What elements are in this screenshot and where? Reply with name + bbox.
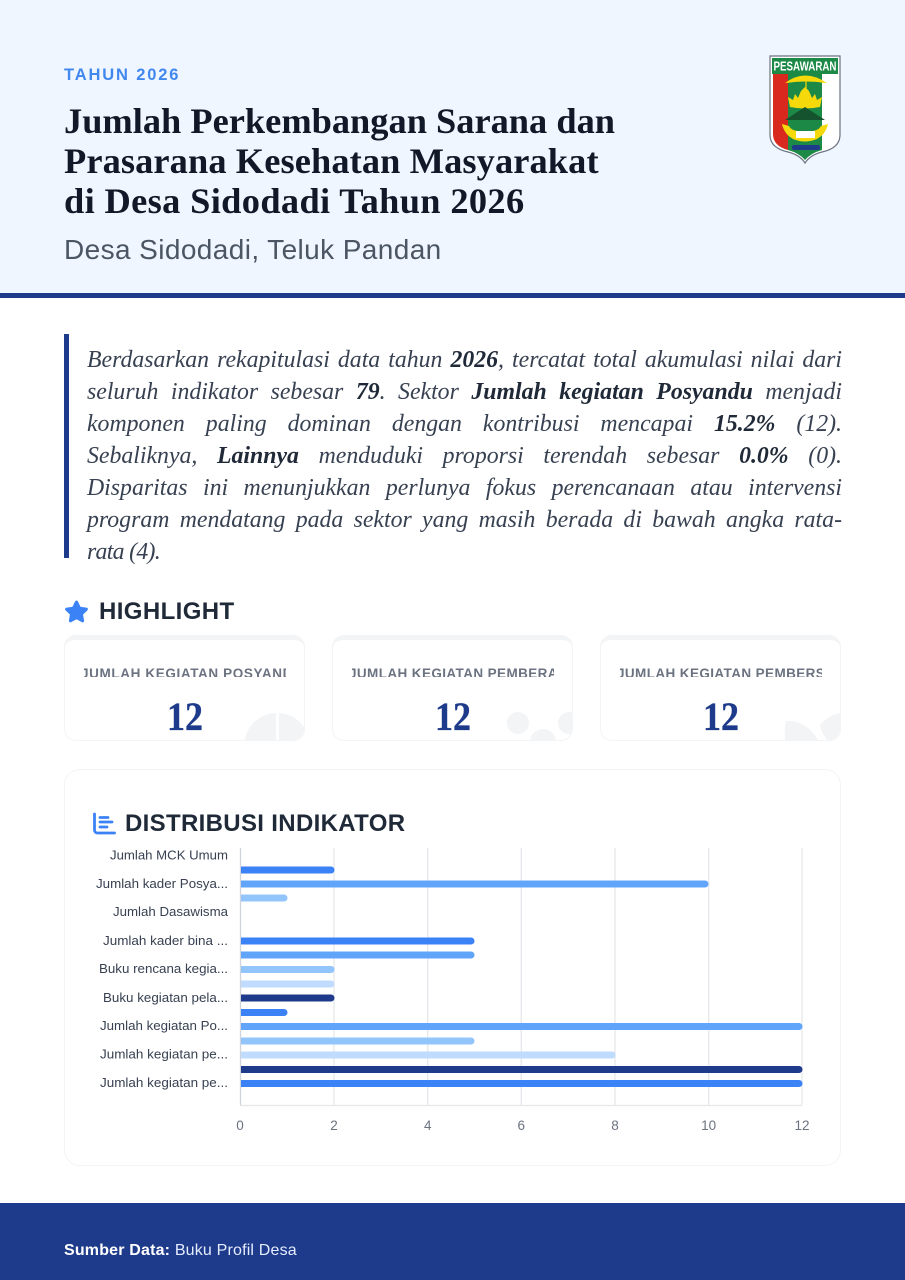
- decoration: circles: [507, 712, 572, 740]
- subtitle: Desa Sidodadi, Teluk Pandan: [64, 234, 442, 265]
- category labels: Jumlah MCK Umum: [110, 848, 228, 862]
- value: 12: [702, 694, 738, 739]
- highlight card 1: [64, 635, 305, 741]
- category labels: Buku kegiatan pela...: [103, 991, 228, 1005]
- x axis values: 10: [701, 1118, 716, 1133]
- year label: TAHUN 2026: [64, 66, 180, 84]
- intro paragraph: Berdasarkan rekapitulasi data tahun 2026, tercatat total akumulasi nilai dari: [87, 347, 842, 373]
- bar chart: [96, 848, 810, 1133]
- title: [64, 101, 615, 221]
- title: Prasarana Kesehatan Masyarakat: [64, 141, 599, 181]
- intro paragraph: rata (4).: [87, 539, 160, 565]
- intro paragraph: komponen paling dominan dengan kontribusi mencapai 15.2% (12).: [87, 411, 842, 437]
- category labels: [96, 848, 228, 1090]
- category labels: Jumlah kegiatan Po...: [100, 1019, 228, 1033]
- intro paragraph: program mendatang pada sektor yang masih berada di bawah angka rata-: [87, 507, 842, 533]
- value: 12: [434, 694, 470, 739]
- highlight card 3: [600, 635, 841, 741]
- quote accent bar: [64, 334, 68, 558]
- x axis values: 8: [611, 1118, 619, 1133]
- logo: Pesawaran shield: [769, 55, 841, 164]
- panel: distribusi indikator: [64, 769, 841, 1166]
- highlight heading: HIGHLIGHT: [99, 598, 235, 625]
- bars: [241, 866, 802, 1087]
- intro paragraph: Disparitas ini menunjukkan perlunya fokus perencanaan atau intervensi: [87, 475, 842, 501]
- intro paragraph: Sebaliknya, Lainnya menduduki proporsi terendah sebesar 0.0% (0).: [87, 443, 842, 469]
- category labels: Jumlah kegiatan pe...: [100, 1076, 228, 1090]
- decoration: pie: [244, 713, 304, 740]
- intro paragraph: seluruh indikator sebesar 79. Sektor Jumlah kegiatan Posyandu menjadi: [87, 379, 842, 405]
- category labels: Buku rencana kegia...: [99, 962, 228, 976]
- category labels: Jumlah kader bina ...: [103, 934, 228, 948]
- footer band: [0, 1203, 905, 1280]
- value: 12: [166, 694, 202, 739]
- x axis values: [236, 1118, 810, 1133]
- category labels: Jumlah kader Posya...: [96, 877, 228, 891]
- x axis values: 2: [330, 1118, 338, 1133]
- title: Jumlah Perkembangan Sarana dan: [64, 101, 615, 141]
- header band: [0, 0, 905, 298]
- x axis values: 12: [794, 1118, 810, 1133]
- panel heading: DISTRIBUSI INDIKATOR: [125, 810, 405, 837]
- category labels: Jumlah Dasawisma: [113, 905, 228, 919]
- title: di Desa Sidodadi Tahun 2026: [64, 181, 525, 221]
- x axis values: 4: [424, 1118, 432, 1133]
- x axis values: 6: [518, 1118, 525, 1133]
- x axis values: 0: [236, 1118, 244, 1133]
- source text: Sumber Data: Buku Profil Desa: [64, 1242, 297, 1259]
- icon: bar chart: [93, 812, 116, 834]
- intro paragraph: [64, 334, 842, 565]
- highlight card 2: [332, 635, 573, 741]
- decoration: leaves: [785, 713, 840, 740]
- icon: star: [65, 600, 88, 622]
- category labels: Jumlah kegiatan pe...: [100, 1048, 228, 1062]
